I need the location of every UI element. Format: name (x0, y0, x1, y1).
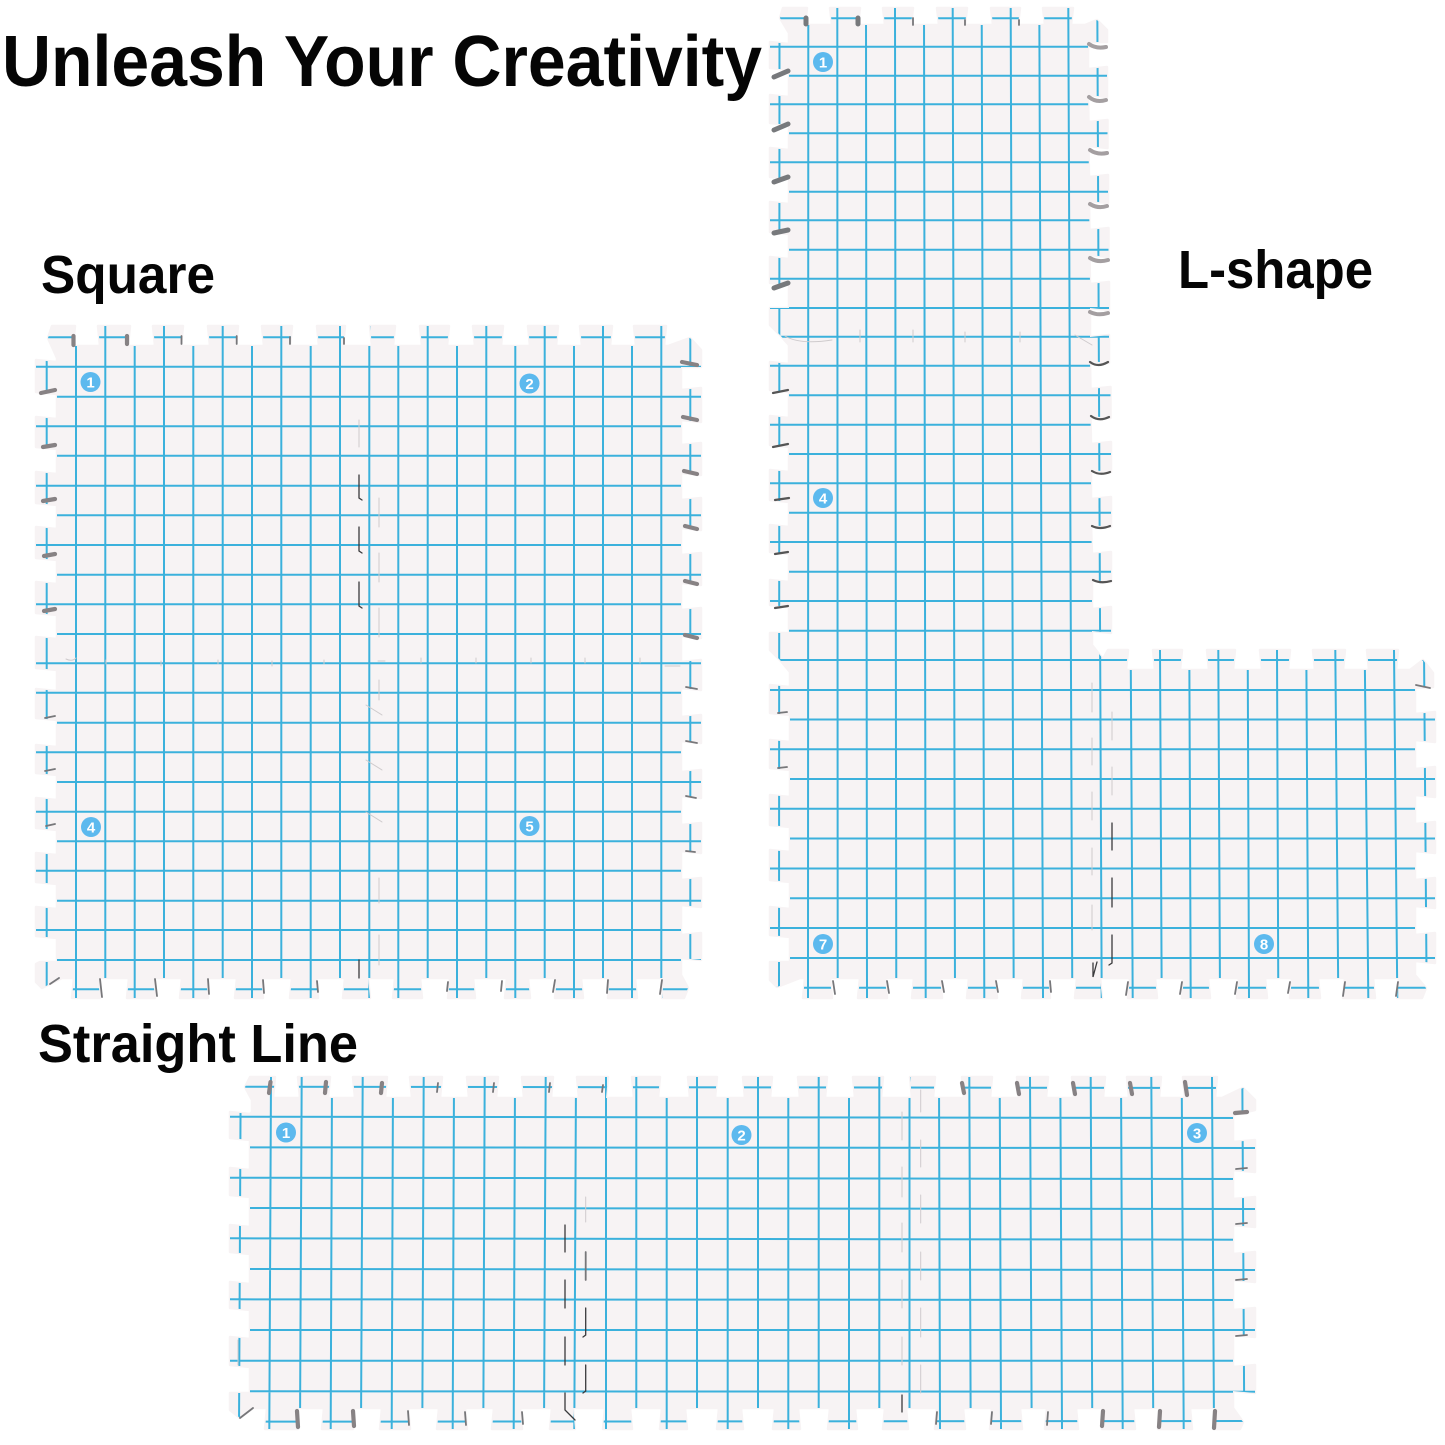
heading: Straight Line: Straight Line (38, 1014, 358, 1074)
number badge 5 (520, 816, 540, 836)
number badge 1: 1 (819, 54, 827, 72)
heading: L-shape: L-shape (1178, 240, 1373, 300)
straight line mat grid lines (230, 1077, 1255, 1429)
L-shape mat grid lines (770, 8, 1436, 998)
square mat tab edge shading (41, 336, 697, 997)
number badge 3 (1187, 1123, 1207, 1143)
number badge 1: 1 (282, 1125, 290, 1142)
number badge 4 (81, 817, 101, 837)
number badge 8: 8 (1260, 936, 1268, 954)
number badge 2 (520, 374, 540, 394)
number badge 7: 7 (819, 936, 827, 954)
number badge 1 (813, 52, 833, 72)
title: Unleash Your Creativity (2, 22, 762, 102)
number badge 2 (732, 1125, 752, 1145)
panel: square blocking mat assembly (36, 326, 701, 998)
panel: straight line blocking mat assembly (230, 1077, 1255, 1429)
number badge 4 (813, 488, 833, 508)
number badge 4: 4 (819, 490, 828, 508)
number badge 2: 2 (737, 1128, 746, 1144)
L-shape mat tab edge shading (773, 18, 1430, 996)
number badge 1 (276, 1122, 296, 1142)
number badge 3: 3 (1193, 1126, 1201, 1142)
number badge 8 (1254, 934, 1274, 954)
number badge 7 (813, 934, 833, 954)
number badge 2: 2 (525, 376, 534, 393)
heading: Square: Square (41, 245, 215, 305)
number badge 5: 5 (525, 818, 534, 836)
square mat grid lines (36, 326, 701, 998)
panel: L-shape blocking mat assembly (770, 8, 1436, 998)
number badge 4: 4 (87, 820, 96, 836)
straight line mat tab edge shading (238, 1082, 1247, 1428)
number badge 1 (80, 372, 100, 392)
number badge 1: 1 (86, 374, 95, 392)
